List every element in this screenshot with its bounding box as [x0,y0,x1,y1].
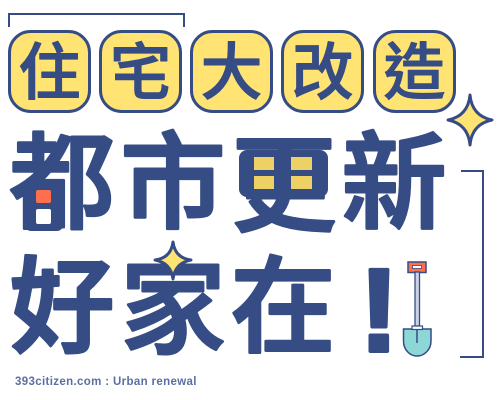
heading line: 好家在！: 好 [9,250,115,367]
heading line: 都市更新: 更 [231,129,337,246]
tile: 改: 改 [291,39,354,108]
tile: 大: 大 [200,39,263,108]
icon: shovel [404,262,431,356]
tile: 造 [374,32,454,112]
heading line: 好家在！ [9,245,399,377]
window accents for 更 [239,150,328,197]
tile: 宅: 宅 [109,39,172,108]
tile: 改 [282,32,362,112]
window accents for 都 [25,184,63,231]
icon: small sparkle on 家 [155,242,191,279]
tile: 大 [192,32,272,112]
heading line: 都市更新: 都 [9,126,115,243]
heading line: 好家在！: 家 [120,251,226,368]
heading line: 都市更新: 市 [120,126,226,243]
heading line: 都市更新 [9,126,447,246]
heading: 住宅大改造 tiles [10,32,454,112]
heading line: 好家在！: ! [359,245,399,377]
tile: 宅 [100,32,180,112]
heading line: 好家在！: 在 [230,250,336,367]
tile: 住: 住 [18,39,81,108]
heading line: 都市更新: 新 [341,126,447,243]
tile: 造: 造 [383,39,446,108]
right bracket [460,171,483,357]
footer credit: 393citizen.com : Urban renewal [15,376,197,388]
top bracket [9,14,184,27]
tile: 住 [10,32,90,112]
icon: large sparkle [448,95,492,145]
